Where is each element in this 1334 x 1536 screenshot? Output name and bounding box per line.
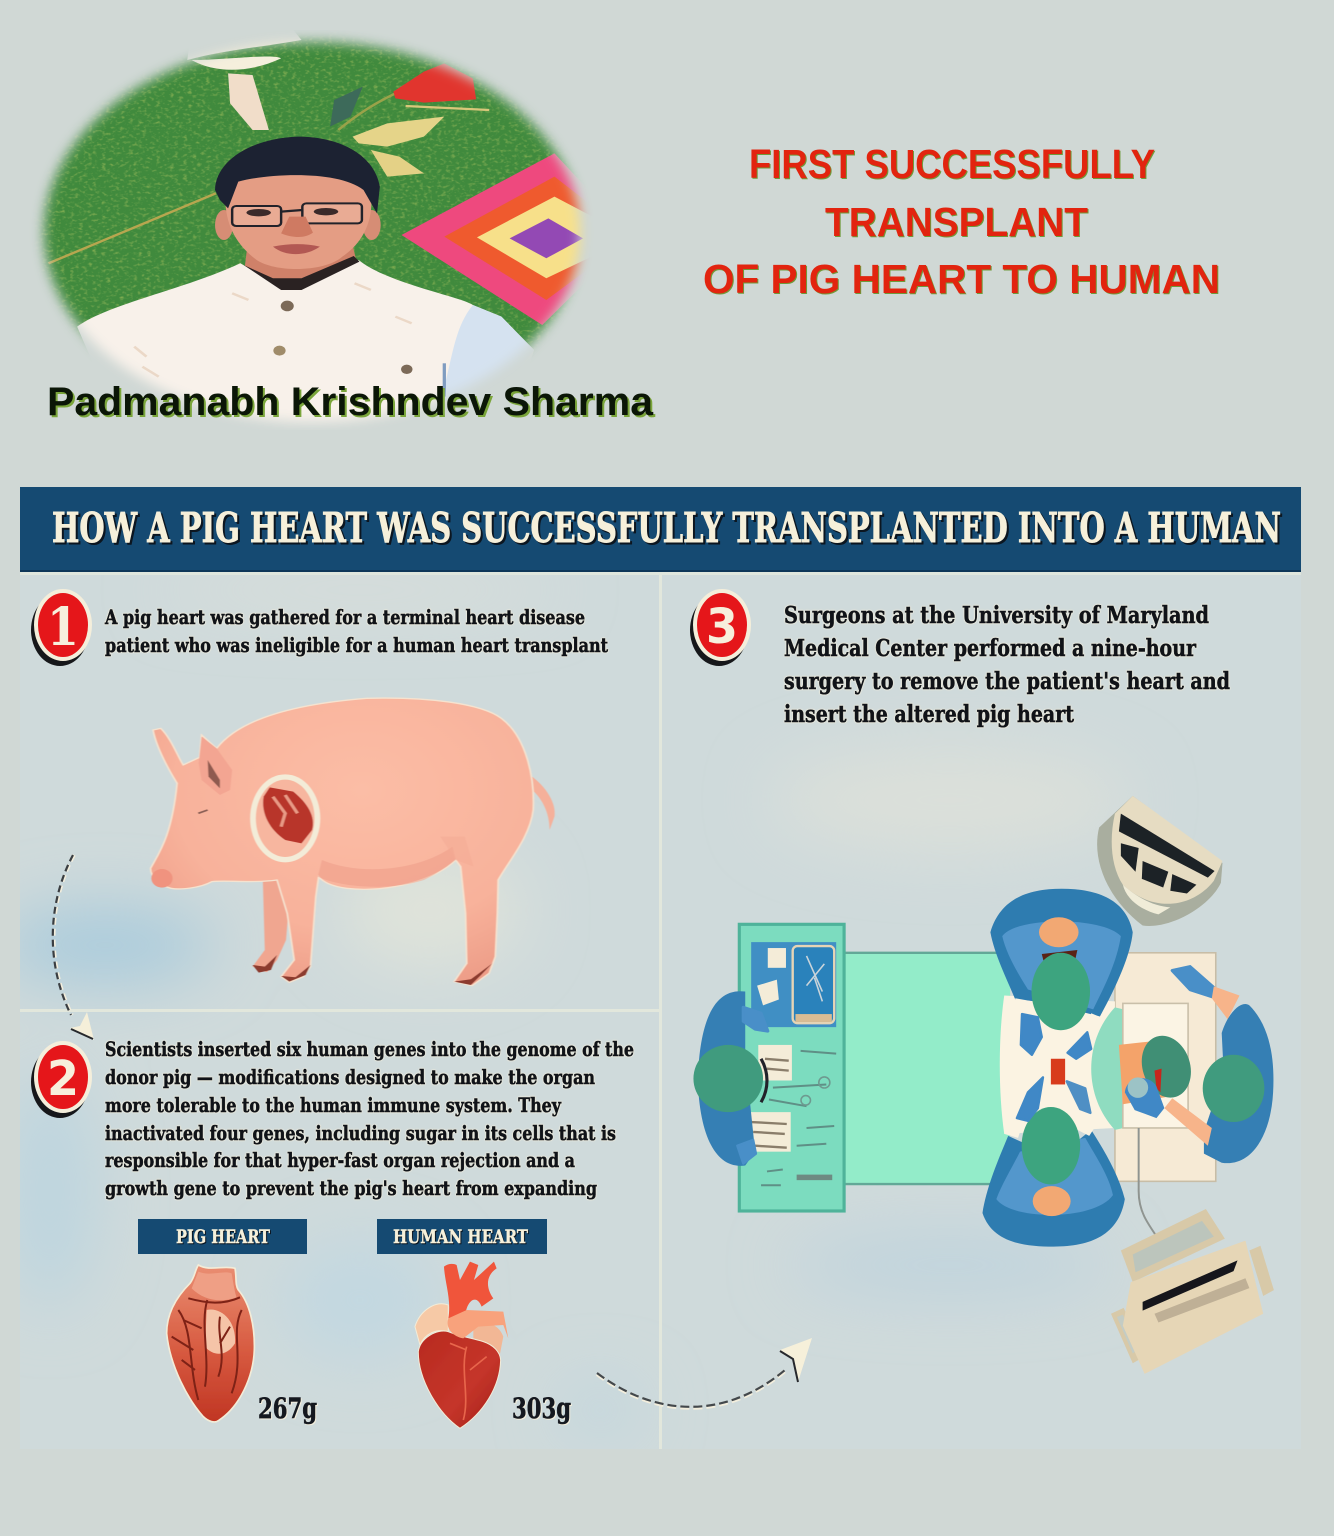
hooves — [253, 955, 492, 985]
surgeon: bottom — [982, 1077, 1125, 1247]
operating room illustration — [693, 796, 1274, 1374]
badge: step 2: 2 — [47, 1051, 79, 1107]
incision — [1051, 1059, 1065, 1084]
badge: step 1 — [31, 589, 92, 666]
label: human heart — [377, 1219, 547, 1254]
patient head — [1119, 1029, 1199, 1118]
label: pig heart: PIG HEART — [176, 1226, 270, 1248]
step 2 text: inactivated four genes, including sugar in its cells that is — [105, 1121, 616, 1145]
arrow: step 1 to 2 — [53, 855, 94, 1040]
step 2 text: more tolerable to the human immune system. They — [105, 1093, 562, 1117]
surgeon: left — [693, 991, 768, 1166]
pig belly shade — [318, 847, 456, 887]
surgeon: top — [990, 889, 1133, 1059]
pig snout — [151, 869, 173, 888]
header band — [20, 487, 1301, 575]
patient monitor — [1111, 1209, 1274, 1374]
pig body — [151, 698, 533, 986]
surgical drape — [1000, 995, 1115, 1134]
panel: content background — [20, 770, 1070, 1366]
author name: Padmanabh Krishndev Sharma — [47, 380, 654, 424]
heart inset — [250, 774, 320, 862]
pig illustration — [151, 698, 555, 986]
step 2 text: growth gene to prevent the pig's heart from expanding — [105, 1176, 597, 1200]
patient head end — [1115, 953, 1216, 1181]
step 2 text: donor pig — modifications designed to make the organ — [105, 1065, 595, 1089]
badge: step 2 — [31, 1041, 92, 1118]
patient pillow — [1123, 1003, 1188, 1128]
step 3 text: insert the altered pig heart — [784, 700, 1074, 728]
title: OF PIG HEART TO HUMAN — [703, 256, 1220, 302]
step 2 text: responsible for that hyper-fast organ rejection and a — [105, 1148, 575, 1172]
step 3 text: surgery to remove the patient's heart and — [784, 667, 1230, 695]
operating table — [844, 953, 1010, 1184]
pig tail — [528, 775, 555, 830]
icon: pig heart — [167, 1265, 254, 1422]
step 1 text: A pig heart was gathered for a terminal heart disease — [104, 605, 585, 629]
pig eye — [198, 810, 208, 813]
step 3 text — [784, 601, 1230, 728]
title — [703, 141, 1220, 302]
step 1 text — [104, 605, 609, 657]
weight: pig heart: 267g — [258, 1392, 317, 1425]
instrument tray — [739, 924, 844, 1211]
step 1 text: patient who was ineligible for a human heart transplant — [105, 633, 609, 657]
pig ear — [199, 737, 232, 795]
step 3 text: Surgeons at the University of Maryland — [784, 601, 1209, 629]
panel dividers — [20, 575, 662, 1449]
icon: human heart — [415, 1262, 508, 1428]
anesthesia screen — [1091, 1007, 1124, 1130]
step 2 text — [105, 1037, 634, 1200]
title: FIRST SUCCESSFULLY — [749, 141, 1155, 187]
label: pig heart — [138, 1219, 307, 1254]
monitor cable — [1139, 1128, 1166, 1251]
overhead surgical light — [1097, 796, 1222, 926]
step 2 text: Scientists inserted six human genes into the genome of the — [105, 1037, 634, 1061]
label: human heart: HUMAN HEART — [393, 1226, 528, 1248]
arrow: step 2 to 3 — [597, 1338, 812, 1408]
badge: step 3 — [690, 589, 751, 666]
weight: human heart: 303g — [512, 1392, 571, 1425]
far leg — [253, 877, 291, 972]
surgeon: right — [1164, 967, 1273, 1163]
hind leg crease — [440, 837, 474, 867]
badge: step 3: 3 — [706, 599, 738, 655]
step 3 text: Medical Center performed a nine-hour — [784, 634, 1196, 662]
badge: step 1: 1 — [47, 597, 79, 658]
portrait photo in soft oval — [35, 32, 588, 426]
title: TRANSPLANT — [825, 199, 1088, 245]
